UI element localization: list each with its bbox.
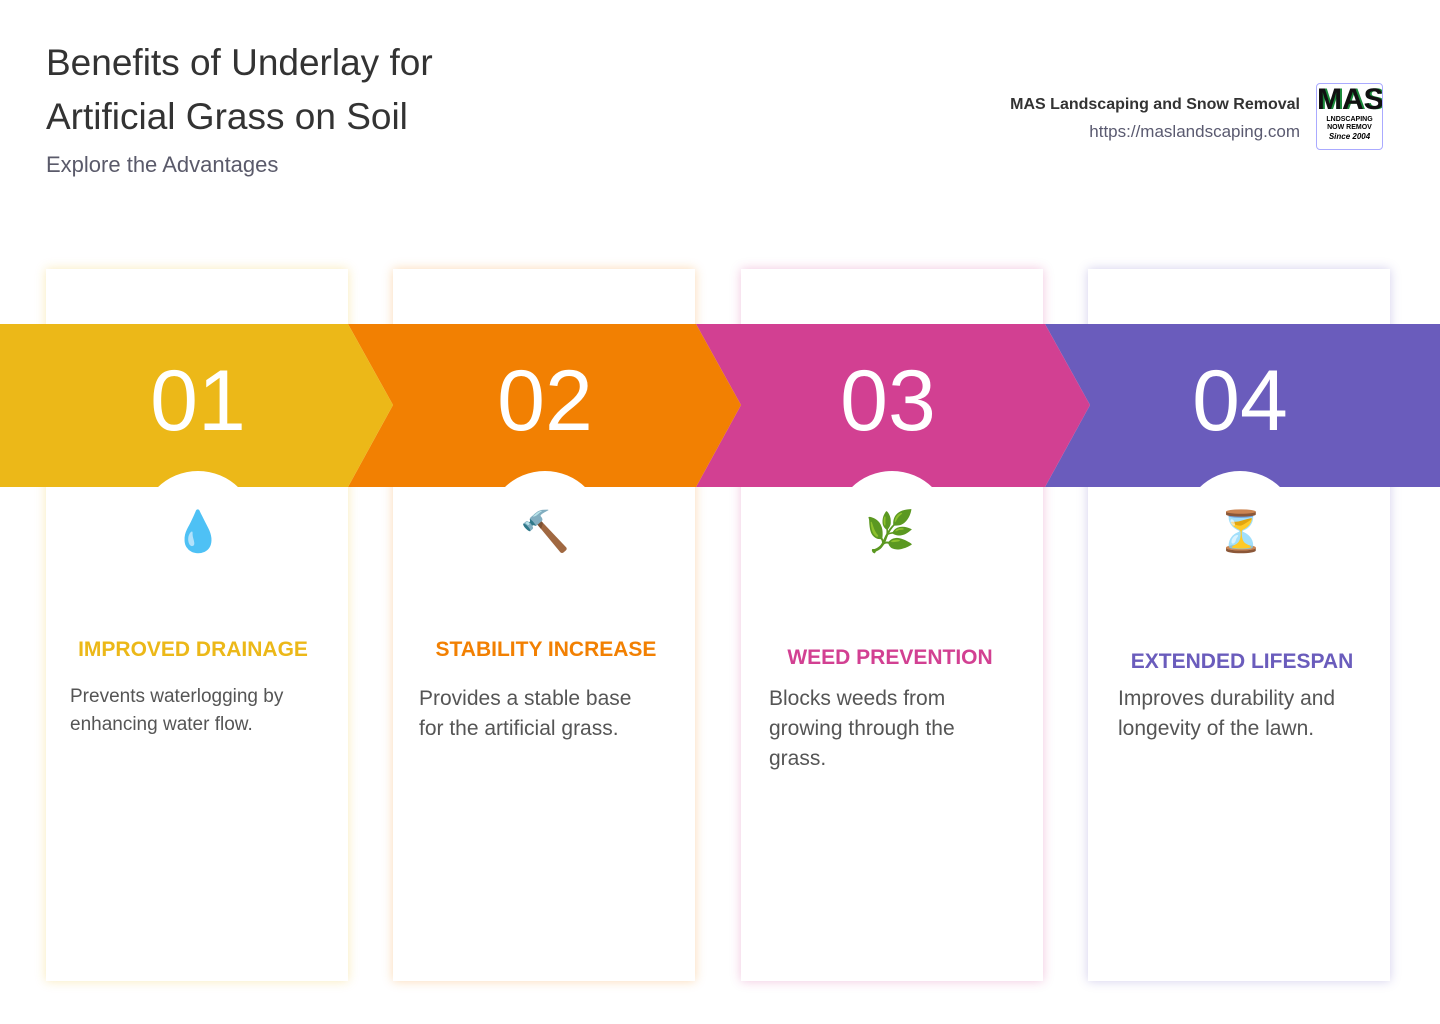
logo: NOW REMOV [1327,124,1372,131]
chevron band [0,324,1440,487]
text: growing through the [769,717,955,740]
logo: Since 2004 [1329,132,1370,141]
text: grass. [769,747,826,770]
text: 03 [840,353,936,449]
text: 02 [497,353,593,449]
text: Blocks weeds from [769,687,945,710]
descriptions: enhancing water flow. [70,714,253,735]
card 4 [1088,269,1390,981]
numbers: 01 [150,353,246,449]
brand text: MAS Landscaping and Snow Removal [1010,96,1300,113]
title [46,42,433,137]
title: Benefits of Underlay for [46,42,433,83]
title: Artificial Grass on Soil [46,96,408,137]
card 3 [741,269,1043,981]
logo: LNDSCAPING [1326,116,1373,123]
subtitle: Explore the Advantages [46,152,278,177]
icon: hourglass: ⏳ [1216,508,1266,555]
brand text: https://maslandscaping.com [1089,122,1300,141]
icon: water drop: 💧 [173,508,223,555]
titles: IMPROVED DRAINAGE [78,638,308,661]
circles [140,471,256,587]
text: for the artificial grass. [419,717,619,740]
descriptions: Prevents waterlogging by [70,686,283,707]
text: WEED PREVENTION [787,646,993,669]
descriptions [70,686,284,735]
text: Provides a stable base [419,687,631,710]
logo [1316,83,1383,150]
icon: hammer: 🔨 [520,508,570,555]
text: longevity of the lawn. [1118,717,1314,740]
card 2 [393,269,695,981]
text: 04 [1192,353,1288,449]
logo: MAS [1317,83,1383,116]
text: Improves durability and [1118,687,1335,710]
text: EXTENDED LIFESPAN [1131,650,1353,673]
icon: herb: 🌿 [865,508,915,555]
text: STABILITY INCREASE [436,638,656,661]
brand text [1010,96,1300,141]
card 1 [46,269,348,981]
